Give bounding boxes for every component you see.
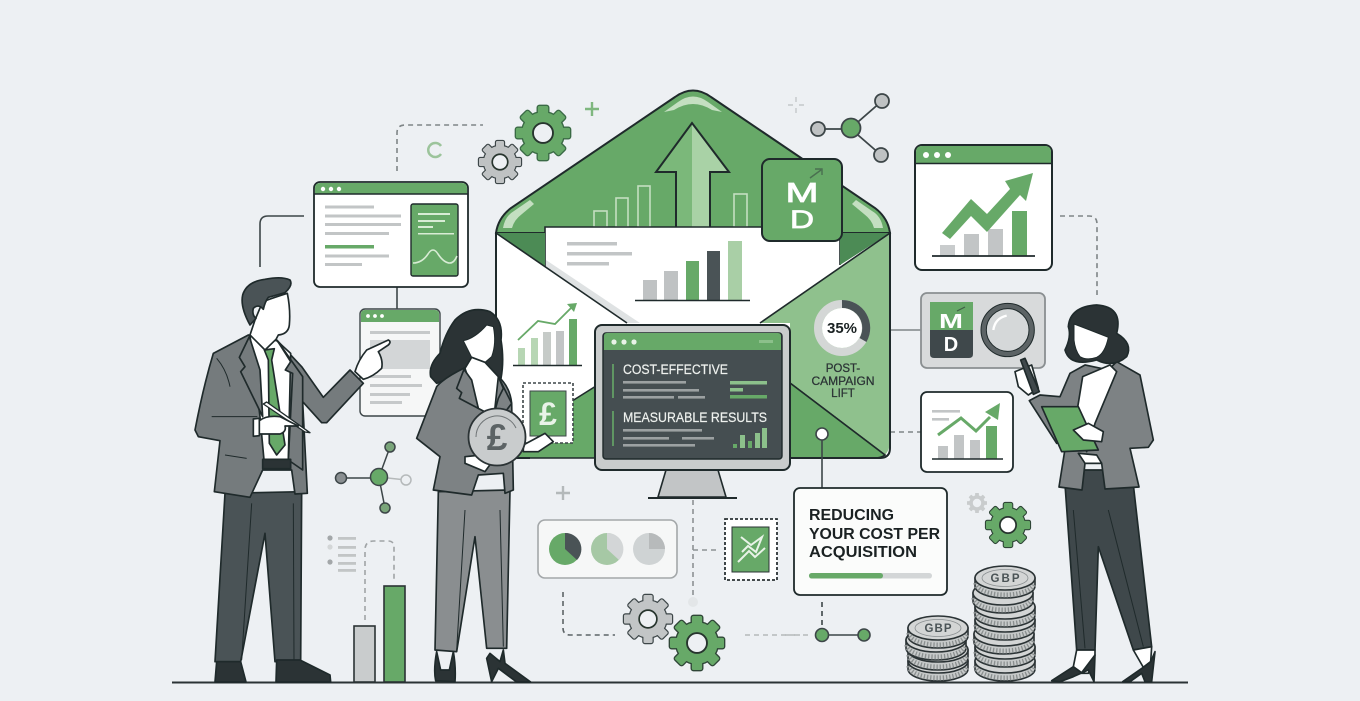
right woman trousers <box>1064 470 1152 650</box>
man pointing hand <box>355 340 390 379</box>
woman trousers <box>435 490 510 652</box>
post-campaign lift label: LIFT <box>831 388 855 400</box>
icon: green plus <box>585 102 599 116</box>
ground line <box>172 682 1188 684</box>
man pen <box>263 402 310 433</box>
coin stack small <box>906 616 968 681</box>
man cuff <box>253 418 259 436</box>
GBP label tall: GBP <box>990 573 1020 585</box>
panel: pie charts <box>538 520 677 578</box>
post-campaign lift label: CAMPAIGN <box>812 376 874 388</box>
gear: green top <box>516 106 570 160</box>
connector node on envelope <box>816 428 828 488</box>
growth bar chart <box>940 211 1027 256</box>
callout: reducing your cost per acquisition: YOUR COST PER <box>809 526 940 543</box>
icon: pale ring <box>428 143 441 157</box>
callout: reducing your cost per acquisition: ACQUISITION <box>809 544 917 561</box>
gear: grey bottom <box>624 595 672 643</box>
screen mini bars <box>730 381 767 398</box>
pie 3 <box>633 533 665 565</box>
35% donut chart <box>818 304 866 352</box>
envelope right panel <box>760 233 890 455</box>
article green inset chart <box>411 204 458 276</box>
envelope bottom right <box>790 383 885 458</box>
article text lines <box>325 206 401 266</box>
MD mini logo <box>930 302 973 358</box>
post-campaign lift label <box>812 363 874 400</box>
MD logo badge: M <box>786 177 818 208</box>
screen mini bar chart <box>733 428 767 448</box>
gear: green right <box>986 503 1030 547</box>
envelope white interior <box>496 233 890 458</box>
screen text lines lower <box>623 429 714 447</box>
progress bar <box>809 573 932 578</box>
gear: green bottom <box>670 616 724 670</box>
gear: grey top <box>479 141 521 183</box>
man figure <box>195 278 390 682</box>
magnifier handle <box>1021 358 1039 394</box>
woman right figure: upper body <box>981 303 1153 490</box>
legend list icon <box>327 535 356 572</box>
gear: faint right <box>967 493 987 513</box>
woman right figure: lower body <box>1052 470 1155 682</box>
man shoes <box>215 660 331 682</box>
envelope bottom left <box>510 386 596 458</box>
screen side rules <box>612 364 614 446</box>
monitor screen <box>603 333 782 459</box>
pound coin: £ <box>487 417 508 458</box>
network icon left <box>336 442 411 513</box>
callout: reducing your cost per acquisition: REDUCING <box>809 507 894 524</box>
monitor <box>595 325 790 498</box>
letter text lines <box>567 242 632 266</box>
man shirt <box>250 336 291 460</box>
magnifier lens <box>981 303 1034 357</box>
icon: faint target <box>788 97 804 113</box>
post-campaign lift label: POST- <box>826 363 860 375</box>
right woman feet <box>1073 647 1152 673</box>
screen text lines upper <box>623 381 705 399</box>
man jacket <box>195 335 363 497</box>
woman jacket <box>417 368 513 495</box>
woman face <box>463 325 495 362</box>
woman blouse <box>465 357 498 417</box>
panel: MD magnifier card <box>921 293 1045 368</box>
right woman hair <box>1065 305 1129 363</box>
woman centre figure <box>417 310 553 682</box>
letter sheet <box>545 227 840 267</box>
man neck and face <box>250 293 290 350</box>
envelope back and flap <box>496 90 890 233</box>
network icon bottom <box>816 628 870 642</box>
letter bar chart <box>635 241 750 300</box>
woman hair <box>430 310 503 383</box>
growth stamp <box>725 519 777 580</box>
right woman jacket <box>1029 362 1153 490</box>
MD mini logo: D <box>944 334 958 356</box>
big upward arrow <box>656 123 729 227</box>
pound stamp: £ <box>539 396 557 432</box>
MD logo badge: D <box>790 206 814 234</box>
right woman upper hand <box>1015 365 1038 395</box>
panel: growth window <box>915 145 1052 270</box>
monitor title bar <box>604 333 781 350</box>
flap bars <box>594 186 747 227</box>
screen heading: cost-effective: COST-EFFECTIVE <box>623 362 728 377</box>
icon: pale dot <box>688 597 698 607</box>
man tie <box>264 349 285 455</box>
monitor stand <box>658 470 726 497</box>
right woman blouse <box>1077 365 1117 452</box>
monitor frame <box>595 325 790 470</box>
growth arrow <box>942 173 1033 239</box>
man hair <box>242 278 291 325</box>
right woman hand <box>1073 423 1103 442</box>
35% donut chart: 35% <box>827 320 857 337</box>
woman shoes <box>435 650 531 682</box>
man holding hand <box>259 416 298 434</box>
screen heading: measurable results: MEASURABLE RESULTS <box>623 410 767 425</box>
pie 2 <box>591 533 623 565</box>
diagonal shadow <box>546 260 640 323</box>
network icon top right <box>811 94 889 162</box>
left envelope growth chart <box>513 303 582 366</box>
flap highlight <box>503 96 883 228</box>
flap shadow <box>496 233 890 267</box>
panel: small document window <box>360 309 440 416</box>
woman hand on coin <box>465 455 493 472</box>
pound stamp <box>523 383 573 443</box>
pound coin <box>468 408 526 466</box>
right woman waist <box>1078 453 1102 463</box>
man trousers <box>215 492 302 662</box>
coin stack tall <box>973 566 1035 681</box>
MD logo badge <box>762 159 842 241</box>
document content <box>370 331 430 404</box>
icon: grey plus <box>556 486 570 500</box>
right woman face <box>1074 324 1108 359</box>
man jacket lapels <box>239 337 303 470</box>
bar chart floor <box>354 586 405 682</box>
envelope left panel edge <box>496 233 627 323</box>
MD mini logo: M <box>939 311 963 333</box>
pie 1 <box>549 533 581 565</box>
right woman shoes <box>1052 652 1155 682</box>
woman hand on stamp <box>523 433 553 452</box>
panel: small growth card <box>921 392 1013 472</box>
callout: reducing your cost per acquisition <box>794 488 947 595</box>
man belt <box>263 459 291 469</box>
GBP label small: GBP <box>924 623 952 635</box>
connector lines <box>260 125 1097 635</box>
panel: article window <box>314 182 468 287</box>
clipboard <box>1042 407 1098 452</box>
envelope <box>496 90 890 458</box>
